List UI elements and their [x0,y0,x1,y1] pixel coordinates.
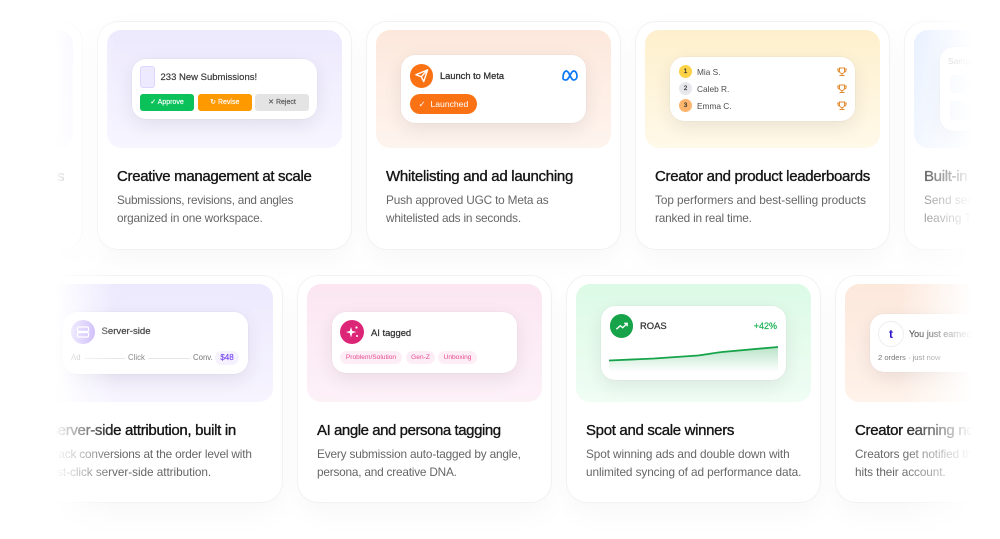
hero: creator earning [845,284,1000,402]
rank 3 [679,99,692,112]
submissions count: 233 New Submissions! [160,72,257,82]
status pill: launched: ✓ Launched [418,99,468,109]
widget: ROAS [601,306,786,380]
ROAS change: +42% [754,321,777,331]
widget: samples [940,48,965,117]
panel: server-side attribution [29,276,282,502]
heading: AI angle and persona tagging [317,422,501,439]
tag: problem/solution: Problem/Solution [346,354,396,361]
description: ranked in real time. [655,211,752,225]
heading: clipped: s [57,168,64,185]
widget: launch to meta [401,55,586,123]
widget: earning notification [870,314,1000,372]
description: Top performers and best-selling products [655,193,866,207]
button: revise [198,94,252,111]
rank 2: 2 [684,85,687,92]
sample label: Sample [948,56,977,66]
panel: spot winners [567,276,820,502]
description [118,196,293,224]
description [586,450,800,478]
tag: gen-z: Gen-Z [411,354,430,361]
button: reject: ✕ Reject [268,99,296,106]
description: organized in one workspace. [117,211,263,225]
tag: unboxing [438,351,477,364]
description: Every submission auto-tagged by angle, [317,447,521,461]
rank 1: 1 [684,68,687,75]
launch label: Launch to Meta [440,70,504,80]
name 3: Emma C. [697,101,732,111]
description: Push approved UGC to Meta as [386,193,548,207]
panel: leaderboards [636,22,889,249]
widget: server-side [63,312,248,374]
widget: submissions [132,59,317,119]
connector [84,358,125,359]
name 2: Caleb R. [697,84,729,94]
widget: leaderboard [670,57,855,121]
heading: Creative management at scale [117,168,311,185]
step: click: Click [128,353,145,362]
panel: built-in samples [904,21,968,250]
heading: Server-side attribution, built in [48,422,236,439]
description: Spot winning ads and double down with [586,447,790,461]
description: whitelisted ads in seconds. [386,211,521,225]
AI tagged label: AI tagged [371,327,411,338]
tag: problem/solution [340,351,402,364]
name 1: Mia S. [697,67,721,77]
description [856,450,968,476]
ROAS label: ROAS [640,320,667,331]
icon: trophies [837,68,847,110]
sample row 1 [950,75,1000,93]
description: Creators get notified th [855,447,972,461]
step: conv: Conv. [193,353,213,362]
heading: Creator earning no [855,422,974,439]
panel: clipped card, row 1 left [58,173,64,181]
server-side label: Server-side [102,326,151,337]
tag: gen-z [406,351,435,364]
rank 3: 3 [684,102,687,109]
description [58,450,252,476]
connector [148,358,190,359]
hero: creative management [107,30,342,148]
heading: Whitelisting and ad launching [386,168,573,185]
description: last-click server-side attribution. [48,465,211,479]
order meta: 2 orders · just now [878,353,940,362]
icon: creator avatar: t [889,327,893,341]
hero: spot winners [576,284,811,402]
panel: creator earning [836,276,1000,502]
chart: ROAS line [609,346,778,369]
description: hits their account. [855,465,946,479]
heading: Spot and scale winners [586,422,734,439]
icon: creator avatar [878,321,904,347]
description: Submissions, revisions, and angles [117,193,293,207]
heading: Built-in [924,168,967,185]
hero: leaderboards [645,30,880,148]
description: leaving T [924,211,972,225]
description [924,196,968,224]
panel: whitelisting [367,22,620,249]
description: Send see [924,193,974,207]
hero: server-side [38,284,273,402]
description: unlimited syncing of ad performance data. [586,465,801,479]
rank 1 [679,65,692,78]
icon: trending up [610,314,633,338]
description: Track conversions at the order level with [48,447,252,461]
panel: AI tagging [298,276,551,502]
hero: AI tagging [307,284,542,402]
hero: whitelisting [376,30,611,148]
tag: unboxing: Unboxing [444,354,471,361]
status pill: launched [410,94,477,114]
icon: sparkle [340,320,364,344]
icon: meta logo [562,70,578,81]
step: ad: Ad [71,353,81,362]
sample row 2 [950,101,1000,120]
heading: Creator and product leaderboards [655,168,870,185]
description [386,196,548,222]
panel: creative management [98,22,351,249]
button: reject [255,94,309,111]
value pill [215,351,239,365]
description [655,196,866,222]
description: persona, and creative DNA. [317,465,457,479]
icon: server [71,320,95,344]
widget: AI tagged [332,312,517,373]
thumbnail [140,66,155,88]
value pill: $48 [220,353,234,362]
earning message: You just earned [909,329,971,339]
rank 2 [679,82,692,95]
icon: paper plane [410,64,433,88]
button: approve [140,94,194,111]
hero: clipped lavender [0,30,73,148]
button: revise: ↻ Revise [210,99,239,106]
button: approve: ✓ Approve [150,99,184,106]
hero: samples [914,30,965,148]
description [318,450,520,478]
